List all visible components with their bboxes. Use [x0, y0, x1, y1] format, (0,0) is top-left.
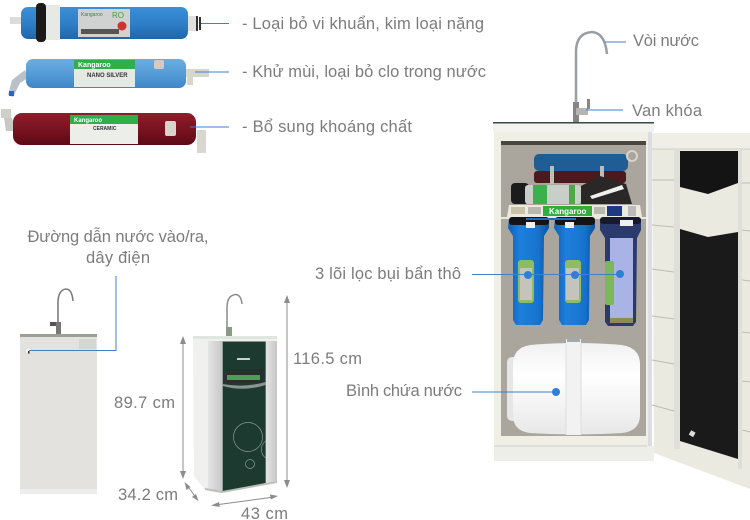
text: water and power connections: dây điện	[86, 249, 150, 267]
brand plate: Kangaroo	[549, 207, 586, 216]
callout: 3 sediment filters: 3 lõi lọc bụi bẩn thô	[315, 265, 461, 283]
cabinet door	[652, 133, 750, 489]
dimension: depth: 34.2 cm	[118, 486, 178, 504]
icon: Ceramic filter cartridge	[1, 109, 206, 153]
icon: RO filter cartridge: Kangaroo	[81, 12, 103, 18]
callout: shut-off valve	[586, 102, 703, 120]
icon: Nano Silver filter cartridge: NANO SILVER	[87, 73, 128, 79]
open cabinet	[493, 32, 750, 489]
icon: Ceramic filter cartridge: CERAMIC	[93, 126, 117, 132]
three sediment filters	[508, 217, 641, 326]
dimension: total height: 116.5 cm	[293, 350, 362, 368]
door glass panel	[223, 342, 266, 492]
water storage tank	[507, 338, 640, 435]
front view cabinet	[193, 294, 277, 493]
icon: RO filter cartridge: RO	[112, 11, 124, 20]
icon: Nano Silver filter cartridge: Kangaroo	[78, 62, 111, 69]
brand plate	[507, 205, 642, 217]
rear view cabinet	[20, 289, 97, 494]
callout: faucet: Vòi nước	[633, 32, 699, 50]
icon: Ceramic filter cartridge: Kangaroo	[74, 118, 102, 124]
callout: shut-off valve: Van khóa	[632, 102, 703, 120]
RO membranes and pump	[511, 151, 637, 204]
callout: 3 sediment filters	[315, 265, 624, 283]
icon: RO filter cartridge	[10, 3, 201, 42]
callout: Ceramic filter: - Bổ sung khoáng chất	[242, 118, 412, 136]
connector line: rear port	[29, 276, 116, 350]
callout: storage tank	[346, 382, 560, 400]
callout: Nano Silver filter: - Khử mùi, loại bỏ clo trong nước	[242, 63, 486, 81]
callout: storage tank: Bình chứa nước	[346, 382, 462, 400]
text: water and power connections: Đường dẫn nước vào/ra,	[28, 227, 208, 246]
icon: Nano Silver filter cartridge	[8, 59, 209, 97]
callout: RO filter: - Loại bỏ vi khuẩn, kim loại nặng	[242, 15, 484, 33]
dimension arrows	[180, 295, 290, 507]
dimension: cabinet height: 89.7 cm	[114, 394, 175, 412]
faucet	[573, 32, 607, 123]
cabinet body	[493, 122, 654, 461]
text: water and power connections	[28, 227, 208, 267]
